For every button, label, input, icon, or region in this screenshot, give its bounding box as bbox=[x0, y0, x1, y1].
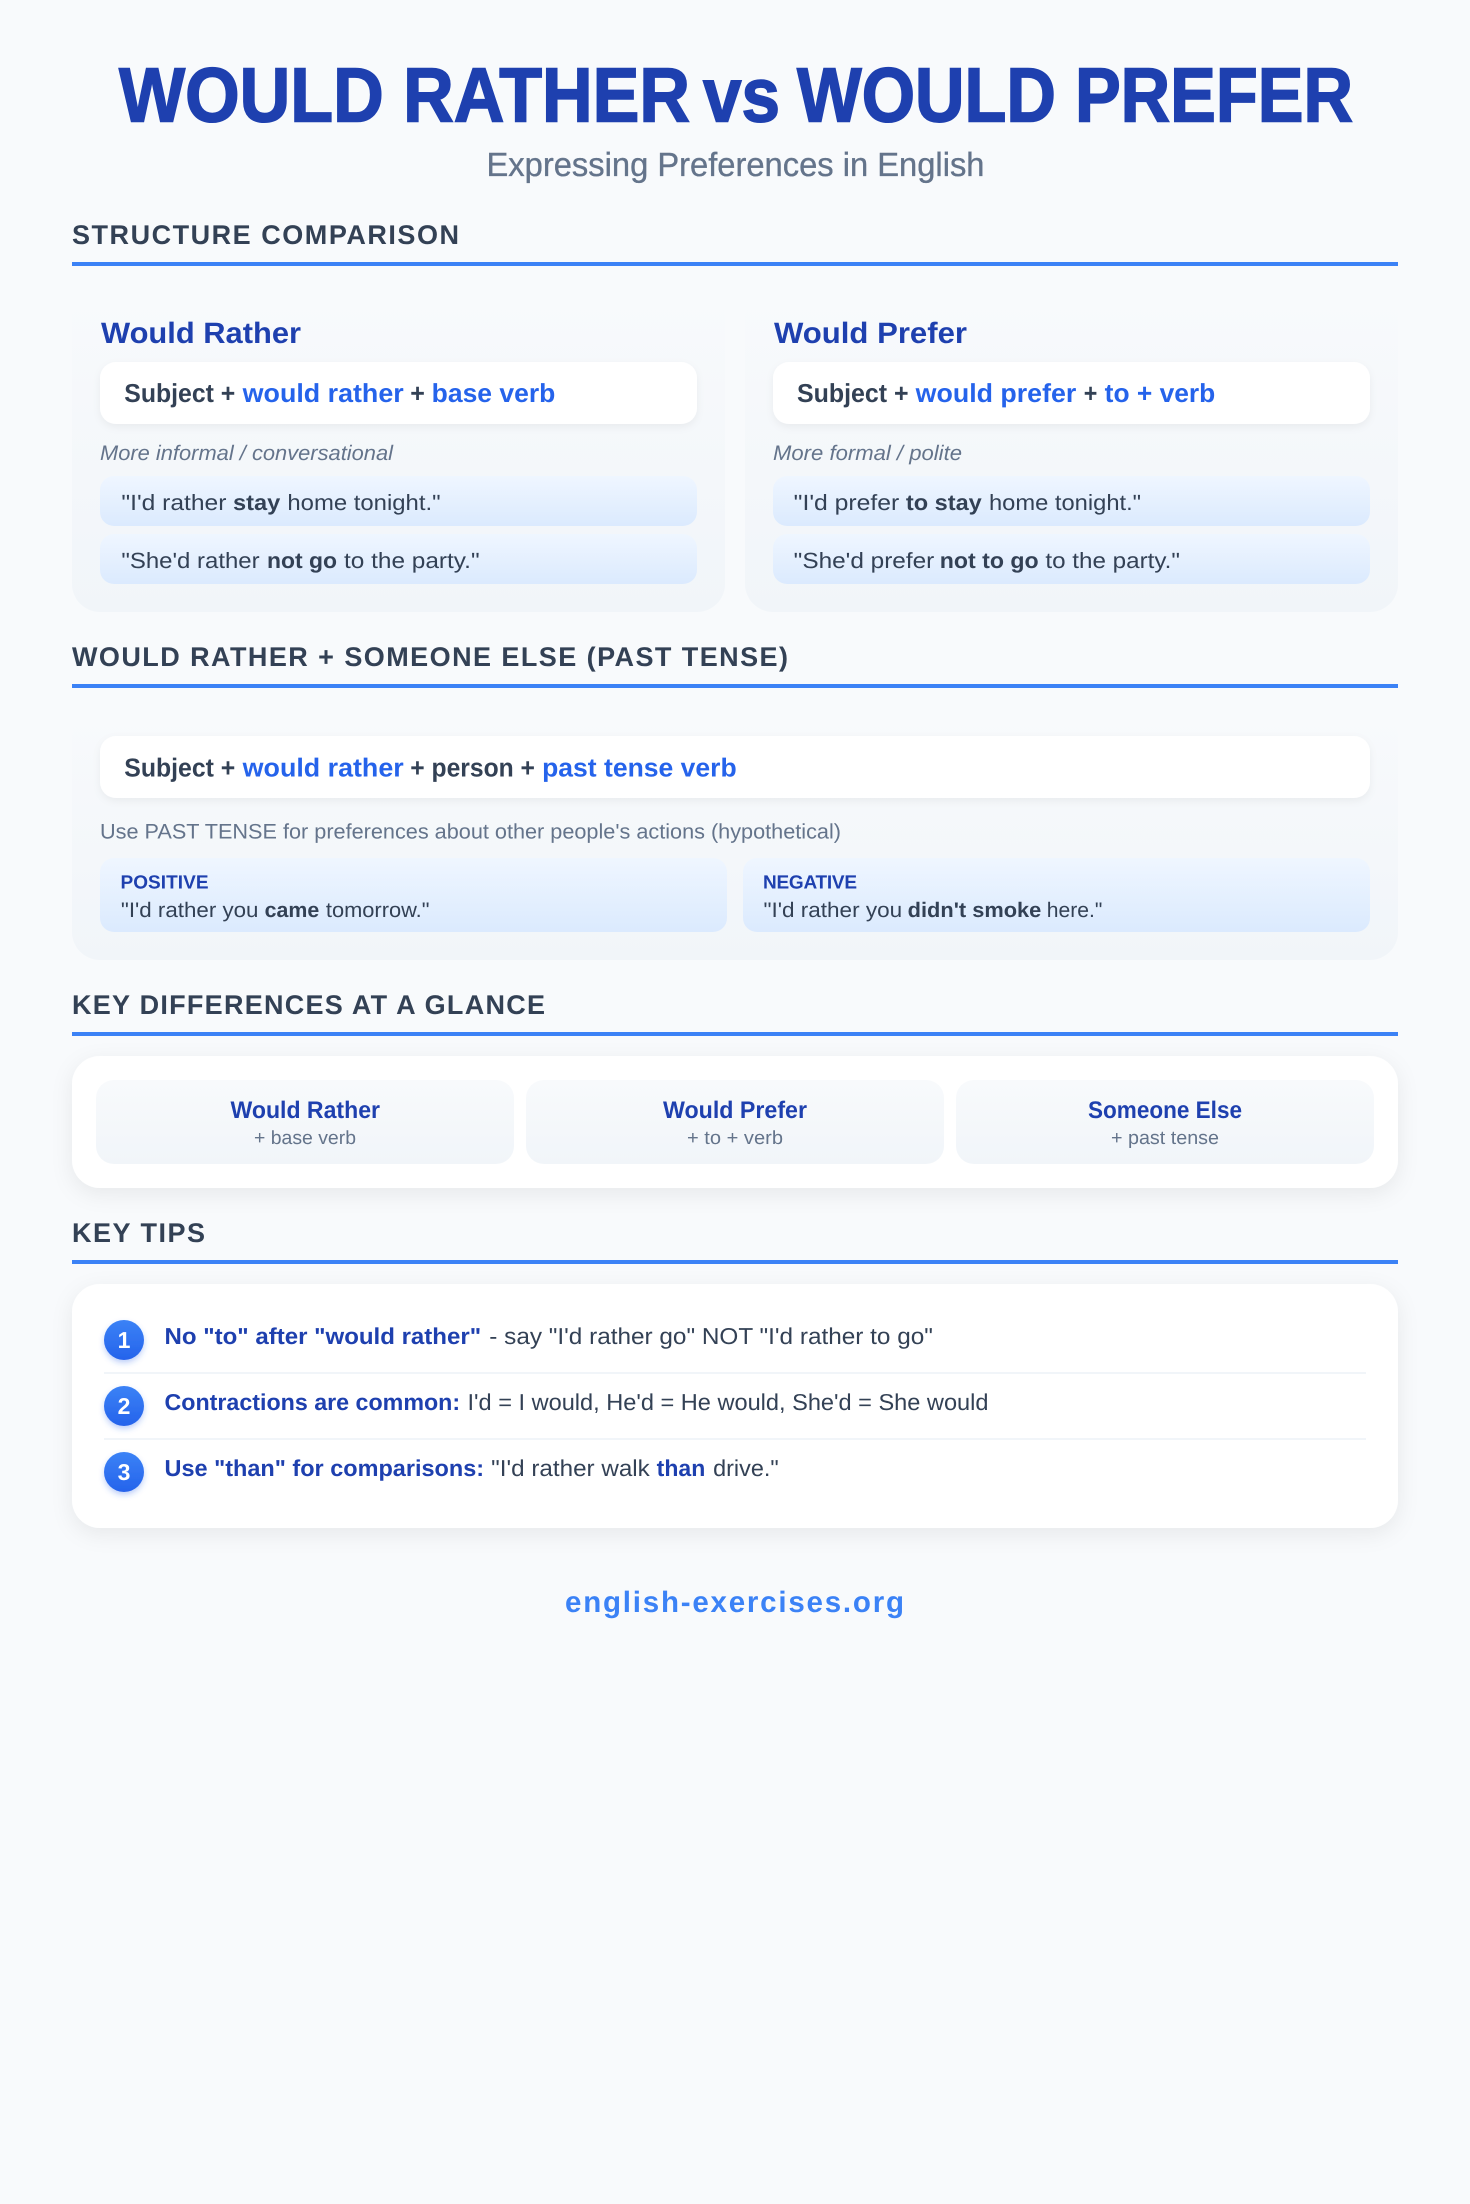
example: not go: not go bbox=[267, 548, 337, 573]
heading: key tips bbox=[72, 1218, 1398, 1264]
example: negative: didn't smoke bbox=[908, 899, 1041, 922]
title: vs bbox=[703, 52, 780, 138]
example: not to go bbox=[773, 534, 1370, 584]
example: stay: stay bbox=[233, 490, 281, 515]
formula: would rather: base verb bbox=[432, 378, 555, 408]
example: not go: "She'd rather bbox=[121, 548, 260, 573]
item: someone else: Someone Else bbox=[1088, 1097, 1242, 1124]
example: not go: to the party." bbox=[344, 548, 480, 573]
heading: structure comparison: STRUCTURE COMPARISON bbox=[72, 220, 459, 250]
tip 1: 1 bbox=[118, 1327, 131, 1353]
example: not to go: not to go bbox=[940, 548, 1039, 573]
example: stay: home tonight." bbox=[287, 490, 441, 515]
tip 3: drive." bbox=[713, 1455, 779, 1481]
formula: would rather: + bbox=[410, 378, 425, 408]
register note: More formal / polite bbox=[773, 442, 962, 465]
example: positive: tomorrow." bbox=[326, 899, 430, 922]
example: positive bbox=[100, 858, 727, 932]
example: to stay bbox=[773, 476, 1370, 526]
formula: past tense: past tense verb bbox=[542, 752, 737, 782]
heading: structure comparison bbox=[72, 220, 1398, 266]
item: someone else bbox=[956, 1080, 1374, 1164]
formula: would rather: Subject + bbox=[124, 378, 235, 408]
item: would prefer: + to + verb bbox=[687, 1128, 783, 1149]
panel heading: would rather: Would Rather bbox=[101, 317, 302, 350]
formula: past tense: Subject + bbox=[124, 752, 235, 782]
heading: someone else: WOULD RATHER + SOMEONE ELSE (PAST TENSE) bbox=[72, 642, 788, 672]
example: to stay: home tonight." bbox=[989, 490, 1141, 515]
formula: past tense: would rather bbox=[242, 752, 404, 782]
example: positive: "I'd rather you bbox=[121, 899, 259, 922]
heading: key tips: KEY TIPS bbox=[72, 1218, 205, 1248]
panel: someone else bbox=[72, 708, 1398, 960]
formula: past tense bbox=[100, 736, 1370, 798]
item: someone else: + past tense bbox=[1111, 1128, 1219, 1149]
item: would rather: + base verb bbox=[254, 1128, 356, 1149]
item: would rather: Would Rather bbox=[230, 1097, 380, 1124]
example: to stay: to stay bbox=[906, 490, 983, 515]
example: negative: NEGATIVE bbox=[763, 872, 857, 894]
heading: key differences bbox=[72, 990, 1398, 1036]
title: WOULD PREFER bbox=[797, 52, 1353, 138]
example: stay: "I'd rather bbox=[121, 490, 226, 515]
tip 3: 3 bbox=[118, 1459, 130, 1485]
example: stay bbox=[100, 476, 697, 526]
formula: would prefer: + bbox=[1084, 378, 1097, 408]
formula: past tense: + person + bbox=[410, 752, 535, 782]
usage note: Use PAST TENSE for preferences about other people's actions (hypothetical) bbox=[100, 820, 841, 844]
tip 3 bbox=[104, 1452, 779, 1492]
tip 2: Contractions are common: bbox=[164, 1389, 460, 1415]
formula: would prefer: Subject + bbox=[797, 378, 909, 408]
example: not to go: "She'd prefer bbox=[794, 548, 934, 573]
formula: would rather bbox=[100, 362, 697, 424]
example: to stay: "I'd prefer bbox=[794, 490, 899, 515]
example: not go bbox=[100, 534, 697, 584]
formula: would prefer bbox=[773, 362, 1370, 424]
example: negative: "I'd rather you bbox=[764, 899, 902, 922]
example: not to go: to the party." bbox=[1045, 548, 1180, 573]
example: positive: POSITIVE bbox=[120, 872, 208, 894]
title bbox=[119, 52, 1353, 138]
heading: key differences: KEY DIFFERENCES AT A GLANCE bbox=[72, 990, 545, 1020]
panel: key tips bbox=[72, 1284, 1398, 1528]
tip 2: I'd = I would, He'd = He would, She'd = She would bbox=[468, 1389, 988, 1415]
item: would prefer: Would Prefer bbox=[663, 1097, 807, 1124]
tip 2: 2 bbox=[118, 1393, 130, 1419]
example: negative bbox=[743, 858, 1370, 932]
panel: would prefer bbox=[745, 286, 1398, 612]
tip 3: than bbox=[657, 1455, 705, 1481]
tip 1 bbox=[104, 1320, 933, 1360]
item: would rather bbox=[96, 1080, 514, 1164]
panel: key differences bbox=[72, 1056, 1398, 1188]
item: would prefer bbox=[526, 1080, 944, 1164]
tip 1: No "to" after "would rather" bbox=[164, 1323, 481, 1349]
tip 2 bbox=[104, 1386, 988, 1426]
footer: english-exercises.org bbox=[565, 1586, 904, 1619]
panel heading: would prefer: Would Prefer bbox=[774, 317, 968, 350]
tip 3: Use "than" for comparisons: bbox=[164, 1455, 484, 1481]
formula: would prefer: to + verb bbox=[1105, 378, 1215, 408]
tip 3: "I'd rather walk bbox=[491, 1455, 650, 1481]
title: WOULD RATHER bbox=[119, 52, 690, 138]
tip 1: - say "I'd rather go" NOT "I'd rather to go" bbox=[489, 1323, 933, 1349]
subtitle: Expressing Preferences in English bbox=[486, 147, 984, 184]
example: positive: came bbox=[265, 899, 319, 922]
heading: someone else bbox=[72, 642, 1398, 688]
register note: More informal / conversational bbox=[100, 442, 394, 465]
panel: would rather bbox=[72, 286, 725, 612]
example: negative: here." bbox=[1047, 899, 1102, 922]
formula: would rather: would rather bbox=[242, 378, 404, 408]
formula: would prefer: would prefer bbox=[915, 378, 1076, 408]
